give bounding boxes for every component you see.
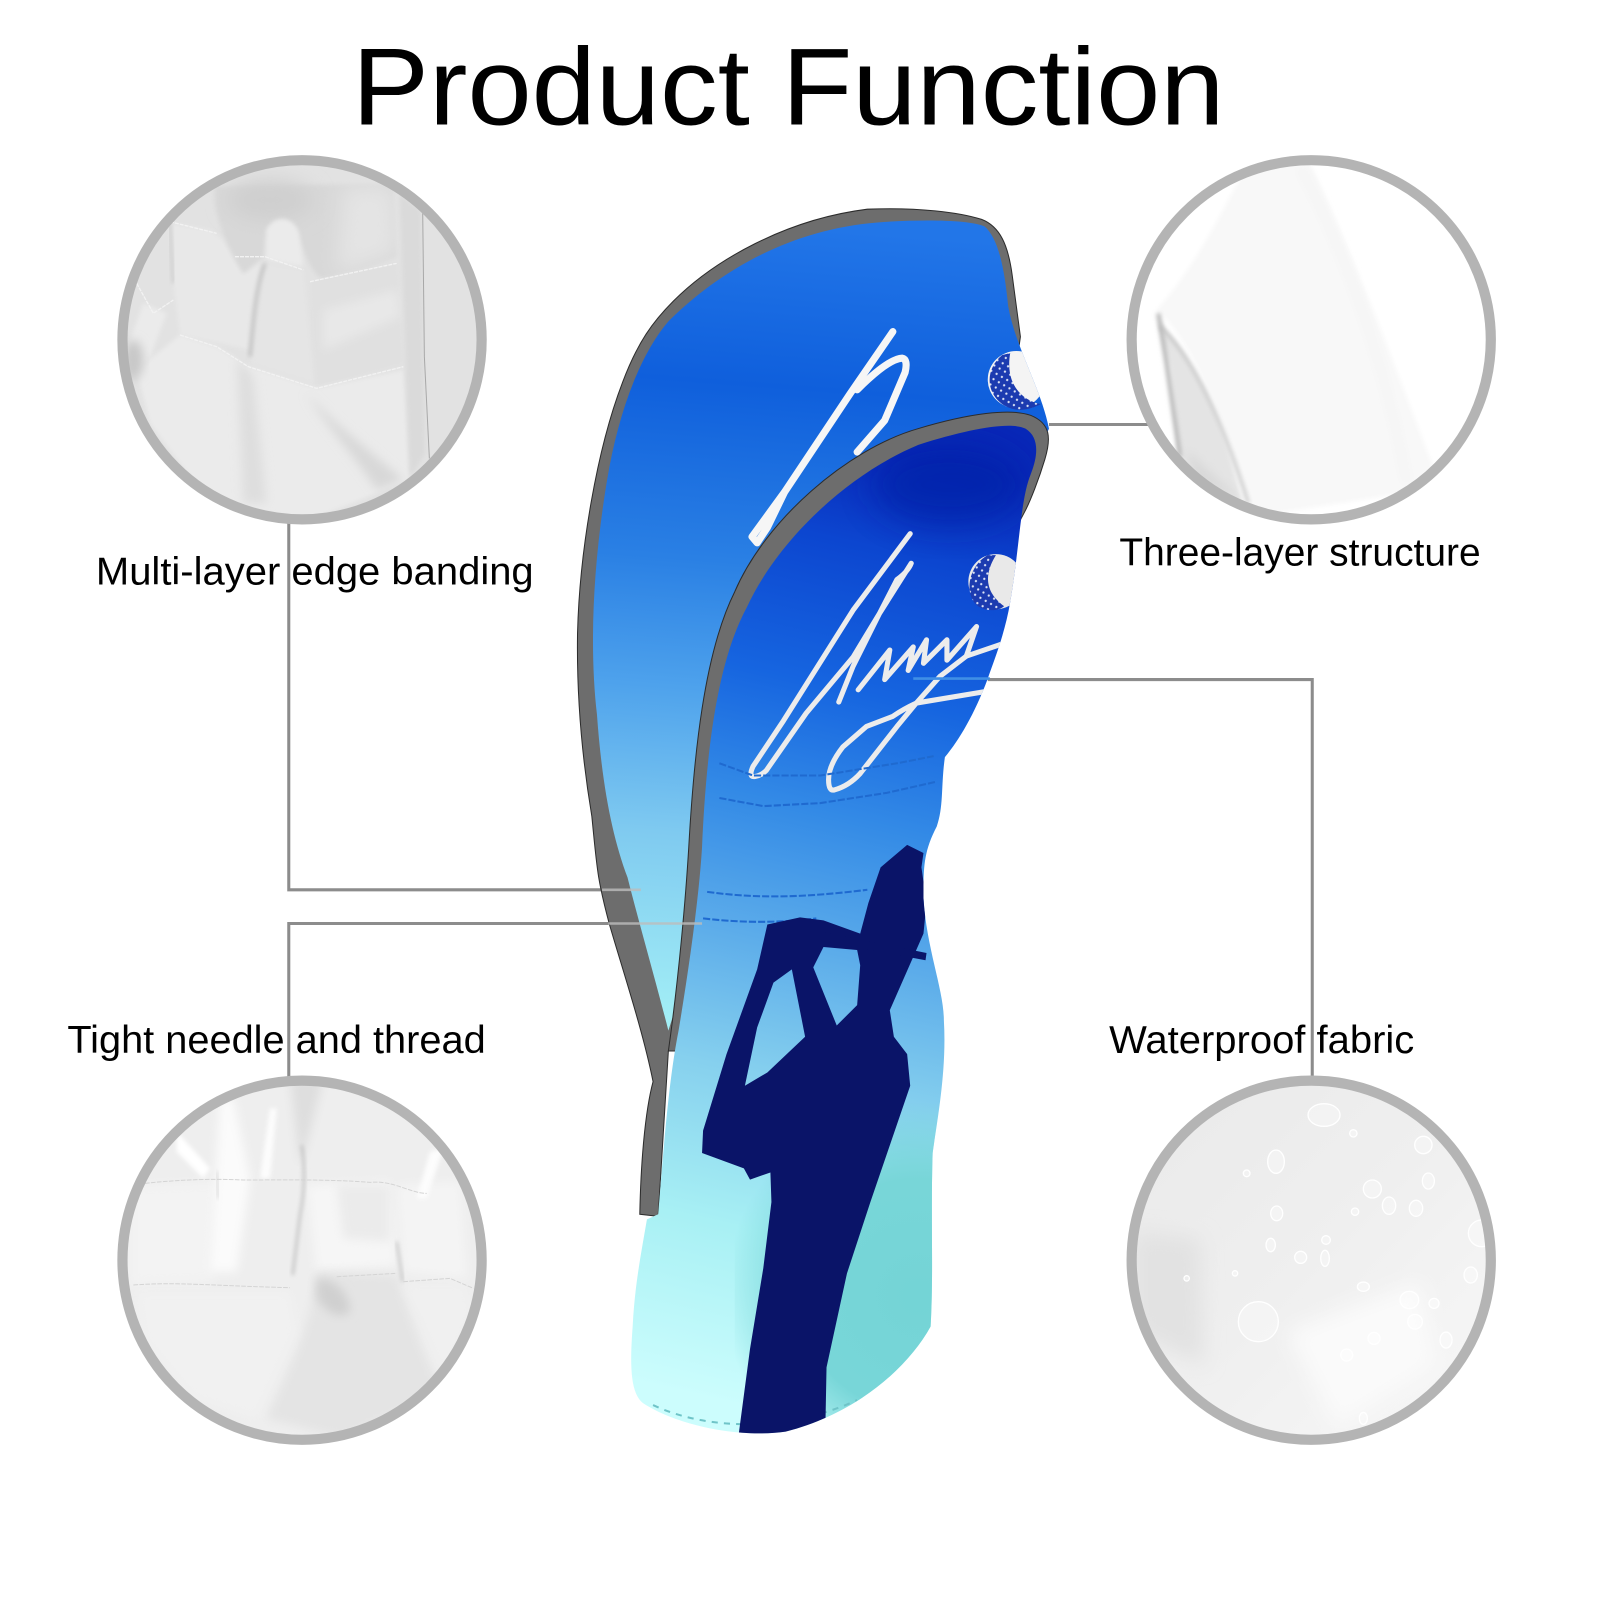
back panel fabric [582,204,1061,1041]
golf club shaft [912,950,926,960]
leader line: multi-layer edge banding [289,522,604,890]
back panel signature [752,332,906,543]
label: waterproof fabric: Waterproof fabric [1109,1019,1414,1062]
blue leader segment on the flap [913,677,990,680]
detail circle: tight needle and thread [112,1071,490,1449]
water droplets [1184,1104,1495,1424]
label: multi-layer edge banding: Multi-layer edge banding [96,551,534,594]
detail circle: multi-layer edge banding [112,153,490,531]
detail circle: waterproof fabric [1122,1071,1500,1449]
product: golf club head cover [577,204,1061,1449]
front flap grey binding [668,412,1048,1051]
golfer silhouette [702,845,927,1437]
label: tight needle and thread: Tight needle and thread [67,1019,486,1062]
back panel grey binding [577,209,1020,1216]
stitching [703,756,937,922]
detail circle: three-layer structure [1122,153,1500,531]
front golf ball [968,554,1016,610]
faint leader lines across the binding [602,890,702,923]
leader line: three-layer structure [1049,423,1148,426]
leader line: waterproof fabric [988,680,1312,1078]
leader line: tight needle and thread [289,923,610,1078]
front signature [751,534,1020,790]
back panel golf ball [988,351,1045,410]
label: three-layer structure: Three-layer structure [1119,531,1481,574]
front body fabric [631,426,1036,1434]
title: Product Function [352,26,1224,148]
